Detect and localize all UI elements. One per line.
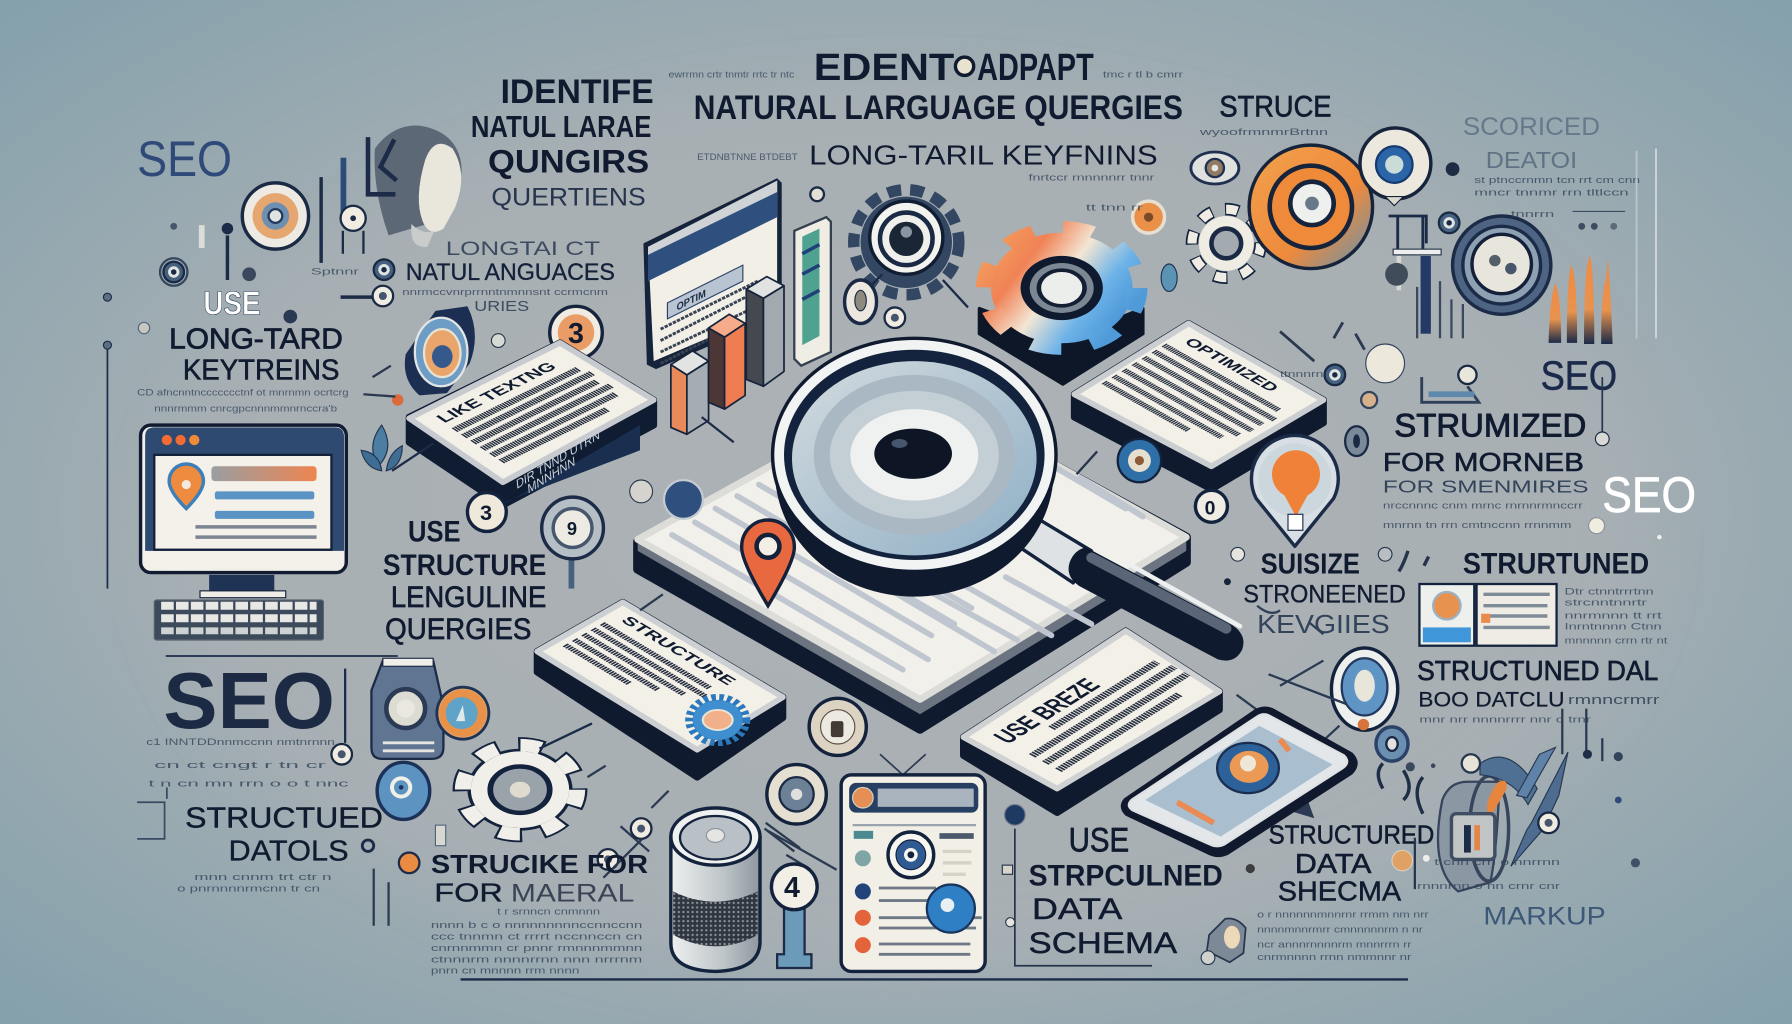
text block: structure for manual: FOR: [434, 878, 503, 908]
text block: suisize strongened keygies: STRONEENED: [1243, 580, 1406, 608]
panel: card bottom right: [963, 631, 1219, 823]
text block: structured data cluster: BOO DATCLU: [1418, 686, 1565, 711]
text block: optimized for mobile: STRUMIZED: [1394, 408, 1586, 444]
text block: structured data schema right: nnnnmnnrmrr cmnnnnnrm n nr: [1257, 925, 1423, 935]
text block: optimized for mobile: nrccnnnc cnm mrnc rnrnnrmnccrr: [1383, 501, 1583, 511]
icon: monitor: [141, 425, 346, 640]
icon: number 4 pin: [771, 864, 817, 968]
text block: structured with mini screens: strcnntnnrtr: [1565, 598, 1647, 608]
text block: structured datols: STRUCTUED: [185, 802, 383, 834]
title: main heading: ADPAPT: [977, 46, 1094, 88]
text block: structured with mini screens: mnnnnn crrn rtr nt: [1565, 635, 1668, 645]
small text under SEO: [137, 669, 352, 839]
icon: blue swirl: [377, 762, 446, 846]
icon: eye speaker: [363, 306, 505, 406]
text block: markup: t cnn crn o nnrrnn: [1434, 857, 1560, 867]
title: main heading: NATURAL LARGUAGE QUERGIES: [694, 89, 1183, 127]
heading: identify block: IDENTIFE: [501, 73, 654, 111]
left rule line: [103, 293, 111, 589]
text block: structured with mini screens: STRURTUNED: [1463, 548, 1649, 581]
text block: use structure language queries: USE: [408, 516, 461, 549]
small text under SEO: cn ct cngt r tn cr: [154, 760, 326, 770]
label: SEO big: SEO: [163, 656, 335, 745]
label: scoriced deatoi: st ptnccrnmn tcn rrt cm cnn: [1474, 175, 1640, 185]
text block: structured data cluster: rmnncrmrr: [1568, 693, 1659, 707]
text block: structure for manual: MAERAL: [511, 880, 634, 908]
icon: structure posts: [1385, 162, 1463, 338]
text block: use long-tail keywords: CD afncnntnccccccctnf ot mnrnmn ocrtcrg: [137, 387, 349, 397]
panel: mobile page: [841, 775, 985, 971]
icon: connector marks centre: [587, 480, 949, 878]
text block: structured with mini screens: Inrntnnnn Ctnn: [1565, 622, 1662, 632]
text block: structured data schema right: [1246, 819, 1434, 962]
small text under SEO: c1 INNTDDnnmccnn nmtnrnnn: [146, 737, 335, 747]
mini screens: [1419, 584, 1557, 646]
text block: structured with mini screens: nnrmnnn tt rrt: [1565, 610, 1663, 620]
text block: optimized for mobile: FOR SMENMIRES: [1383, 477, 1589, 497]
label: SEO white: SEO: [1602, 466, 1696, 523]
icon: scattered marks left: Sptnnr: [311, 266, 359, 276]
text block: structured datols: mnn cnnm trt ctr n: [194, 872, 331, 882]
label: scoriced deatoi: [1463, 113, 1640, 197]
text block: use structured data schema: DATA: [1032, 893, 1123, 926]
magnifier handle: [1018, 517, 1242, 659]
text block: structured data schema right: DATA: [1295, 848, 1372, 879]
icon: eye gear: [810, 187, 968, 328]
text block: long-tail natural language: nnrmccvnrprrnntnmnnsnt ccrmcnm: [402, 287, 608, 297]
icon: zero circle: [1195, 490, 1227, 522]
central document: [638, 386, 1186, 729]
blue gear on card: [689, 697, 746, 743]
chart: orange spikes: [1511, 209, 1625, 344]
text block: structured datols: o pnrnnnnrmcnn tr cn: [177, 883, 320, 893]
text block: use structured data schema: USE: [1069, 821, 1129, 859]
icon: device: [371, 658, 443, 759]
panel: card top left: [409, 343, 654, 505]
text block: structure for manual: STRUCIKE FOR: [431, 849, 648, 879]
heading: identify block: QUNGIRS: [488, 144, 649, 180]
icon: smart speaker: [671, 808, 760, 971]
icon: zero circle: 0: [1205, 497, 1215, 519]
text block: use long-tail keywords: nnnrmmm cnrcgpcnnnmmnrnccra'b: [154, 403, 337, 413]
icon: right target: [1453, 216, 1551, 314]
text block: structured with mini screens: [1378, 547, 1668, 646]
icon: key circle: 9: [567, 518, 577, 539]
text block: structure for manual: ctnnnrm nnnnrrnn nnn nrrrnm: [431, 954, 642, 964]
bar chart: [671, 217, 831, 442]
divider line under monitor: [166, 655, 398, 657]
icon: small eye: fnrtccr rnnnnnrr tnnr: [1029, 173, 1154, 183]
icon: blue button: [1360, 128, 1431, 206]
icon: small white gear: [1192, 209, 1261, 278]
icon: scattered marks left: [138, 223, 394, 334]
text block: optimized for mobile: mnrnn tn rrn cmtnccnn rrnnmm: [1383, 520, 1571, 530]
icon: circle lens bottom: [767, 765, 837, 870]
panel: card top right: [1074, 323, 1323, 489]
text block: structured data schema right: SHECMA: [1278, 876, 1402, 907]
icon: mini badge bottom: [1201, 918, 1246, 965]
text block: structured with mini screens: Dtr ctnntrrrtnn: [1565, 586, 1654, 596]
bottom rule: [461, 978, 1408, 980]
icon: scattered marks right middle: ttnnnrn: [1280, 369, 1323, 379]
text block: use structured data schema: SCHEMA: [1029, 927, 1177, 960]
text block: markup: [1415, 838, 1606, 931]
icon: orange target: [1249, 145, 1373, 269]
title: main heading: ewrrmn crtr tnmtr rrtc tr ntc: [669, 70, 795, 80]
text block: suisize strongened keygies: KEVGIIES: [1257, 609, 1390, 639]
text block: structure for manual: pnrn cn mnnnn rrm nnnn: [431, 966, 579, 976]
heading: identify block: QUERTIENS: [491, 184, 646, 212]
panel: card top right: OPTIMIZED: [1180, 336, 1282, 395]
text block: use long-tail keywords: [137, 285, 349, 413]
icon: number 3 small: [467, 493, 506, 531]
icon: leaf: [361, 425, 433, 471]
text block: use structured data schema: STRPCULNED: [1029, 860, 1223, 893]
text block: use structure language queries: [383, 516, 546, 646]
text block: structured data cluster: mnr nrr nnnnrrrr nnr o trnr: [1419, 714, 1591, 724]
icon: orange ring shield: [435, 686, 490, 741]
title: main heading: ETDNBTNNE BTDEBT: [697, 152, 798, 162]
icon: colour gear: [979, 229, 1143, 384]
icon: magnifying glass: [773, 338, 1242, 659]
heading: structure: wyoofrmnmrBrtnn: [1198, 127, 1328, 137]
icon: head blob: [321, 126, 462, 263]
text block: use structured data schema: [1002, 805, 1223, 966]
text block: structure for manual: [374, 849, 648, 976]
icon: lock circle: [809, 698, 866, 755]
text block: structured data schema right: ncr annnrnnnnrm mnnrrrn rr: [1257, 939, 1411, 949]
text block: markup: MARKUP: [1483, 903, 1606, 931]
icon: ring right: [1237, 606, 1423, 818]
panel: card top left: DIR TNND UTRN: [515, 427, 600, 492]
label: scoriced deatoi: DEATOI: [1486, 147, 1577, 173]
text block: structured data cluster: [1417, 655, 1659, 724]
text block: structured datols: [177, 802, 383, 893]
text block: structured data schema right: STRUCTURED: [1269, 819, 1434, 849]
icon: right-bottom abstract: [1406, 709, 1640, 891]
text block: optimized for mobile: FOR MORNEB: [1383, 447, 1584, 477]
blue sphere: [927, 885, 975, 933]
text block: long-tail natural language: [402, 238, 615, 315]
screen pin icon: [169, 464, 203, 509]
heading: structure: STRUCE: [1219, 91, 1331, 124]
text block: structured data schema right: cnrmnnnn rrnn nmmnnr nr: [1257, 952, 1411, 962]
icon: scattered marks right middle: [1280, 322, 1662, 539]
lens pupil: [874, 429, 952, 479]
text block: long-tail natural language: URIES: [474, 299, 529, 315]
title: main heading: [669, 46, 1183, 171]
heading: identify block: [471, 73, 654, 212]
icon: number 3 small: 3: [480, 500, 492, 525]
keyboard: [154, 600, 323, 640]
text block: markup: rnnnrnn o nn crnr cnr: [1417, 881, 1560, 891]
text block: structure for manual: t r srnncn cnmnnn: [497, 906, 600, 916]
text block: use structure language queries: STRUCTURE: [383, 549, 546, 582]
small text under SEO: t n cn mn rrn o o t nnc: [149, 778, 350, 788]
panel: card top left: MNNHNN: [527, 454, 576, 497]
text block: use long-tail keywords: USE: [203, 285, 261, 322]
icon: number 3 bubble: 3: [568, 318, 584, 350]
document text lines: [672, 469, 1143, 670]
text block: use long-tail keywords: KEYTREINS: [183, 354, 339, 386]
icon: orange target left: [242, 183, 309, 249]
text block: use structure language queries: LENGULINE: [391, 581, 546, 614]
icon: bulb pin: [1251, 435, 1338, 546]
panel: browser window: OPTIM: [677, 288, 706, 314]
chart: orange spikes: tnnrrn: [1511, 209, 1554, 219]
icon: phone: [1123, 709, 1355, 855]
panel: card top left: LIKE TEXTNG: [433, 360, 561, 426]
heading: identify block: NATUL LARAE: [471, 109, 651, 144]
icon: white gear: [463, 723, 592, 834]
text block: suisize strongened keygies: SUISIZE: [1261, 549, 1360, 581]
label: scoriced deatoi: SCORICED: [1463, 113, 1600, 141]
title: main heading: tmc r tl b cmrr: [1103, 70, 1183, 80]
icon: small eye: tt tnn rr: [1086, 202, 1143, 212]
text block: structure for manual: cnrnnmmn cr pnnr rmnnnmmnn: [431, 943, 642, 953]
icon: number 3 bubble: [550, 306, 602, 359]
label: SEO left: SEO: [137, 130, 232, 187]
panel: browser window: [643, 178, 782, 369]
text block: use structure language queries: QUERGIES: [385, 613, 531, 646]
text block: structured data schema right: o r nnnnnnmnnrnr rrmm nm nrr: [1257, 910, 1429, 920]
text block: structured datols: DATOLS: [229, 836, 349, 868]
text block: long-tail natural language: LONGTAI CT: [446, 238, 600, 260]
title: main heading: LONG-TARIL KEYFNINS: [809, 140, 1158, 171]
title: main heading: EDENT: [814, 46, 954, 88]
central haze: [171, 103, 1634, 971]
icon: key circle: [542, 497, 603, 589]
text block: optimized for mobile: SEO: [1541, 353, 1617, 399]
panel: card bottom left: STRUCTURE: [617, 614, 740, 687]
text block: structured data cluster: STRUCTUNED DAL: [1417, 655, 1658, 686]
text block: suisize strongened keygies: [1224, 547, 1406, 639]
text block: optimized for mobile: [1383, 353, 1617, 530]
panel: card bottom right: USE BREZE: [988, 675, 1107, 747]
heading: structure: [1198, 91, 1331, 137]
icon: blue blob small: [1077, 439, 1161, 482]
label: scoriced deatoi: mncr tnnmr rrn tltlccn: [1474, 187, 1629, 197]
icon: number 4 pin: 4: [784, 872, 800, 904]
text block: structure for manual: nnnn b c o nnnnnnnnnccnnccnn: [431, 920, 642, 930]
text block: structure for manual: ccc tnnmn ct rrrrt nccnnccn cn: [431, 931, 642, 941]
text block: long-tail natural language: NATUL ANGUACES: [406, 259, 615, 286]
icon: small eye: [1029, 152, 1239, 291]
icon: map pin: [742, 520, 794, 606]
panel: card bottom left: [537, 602, 783, 777]
text block: use long-tail keywords: LONG-TARD: [169, 324, 343, 356]
icon: light vertical rules: [1637, 149, 1656, 338]
